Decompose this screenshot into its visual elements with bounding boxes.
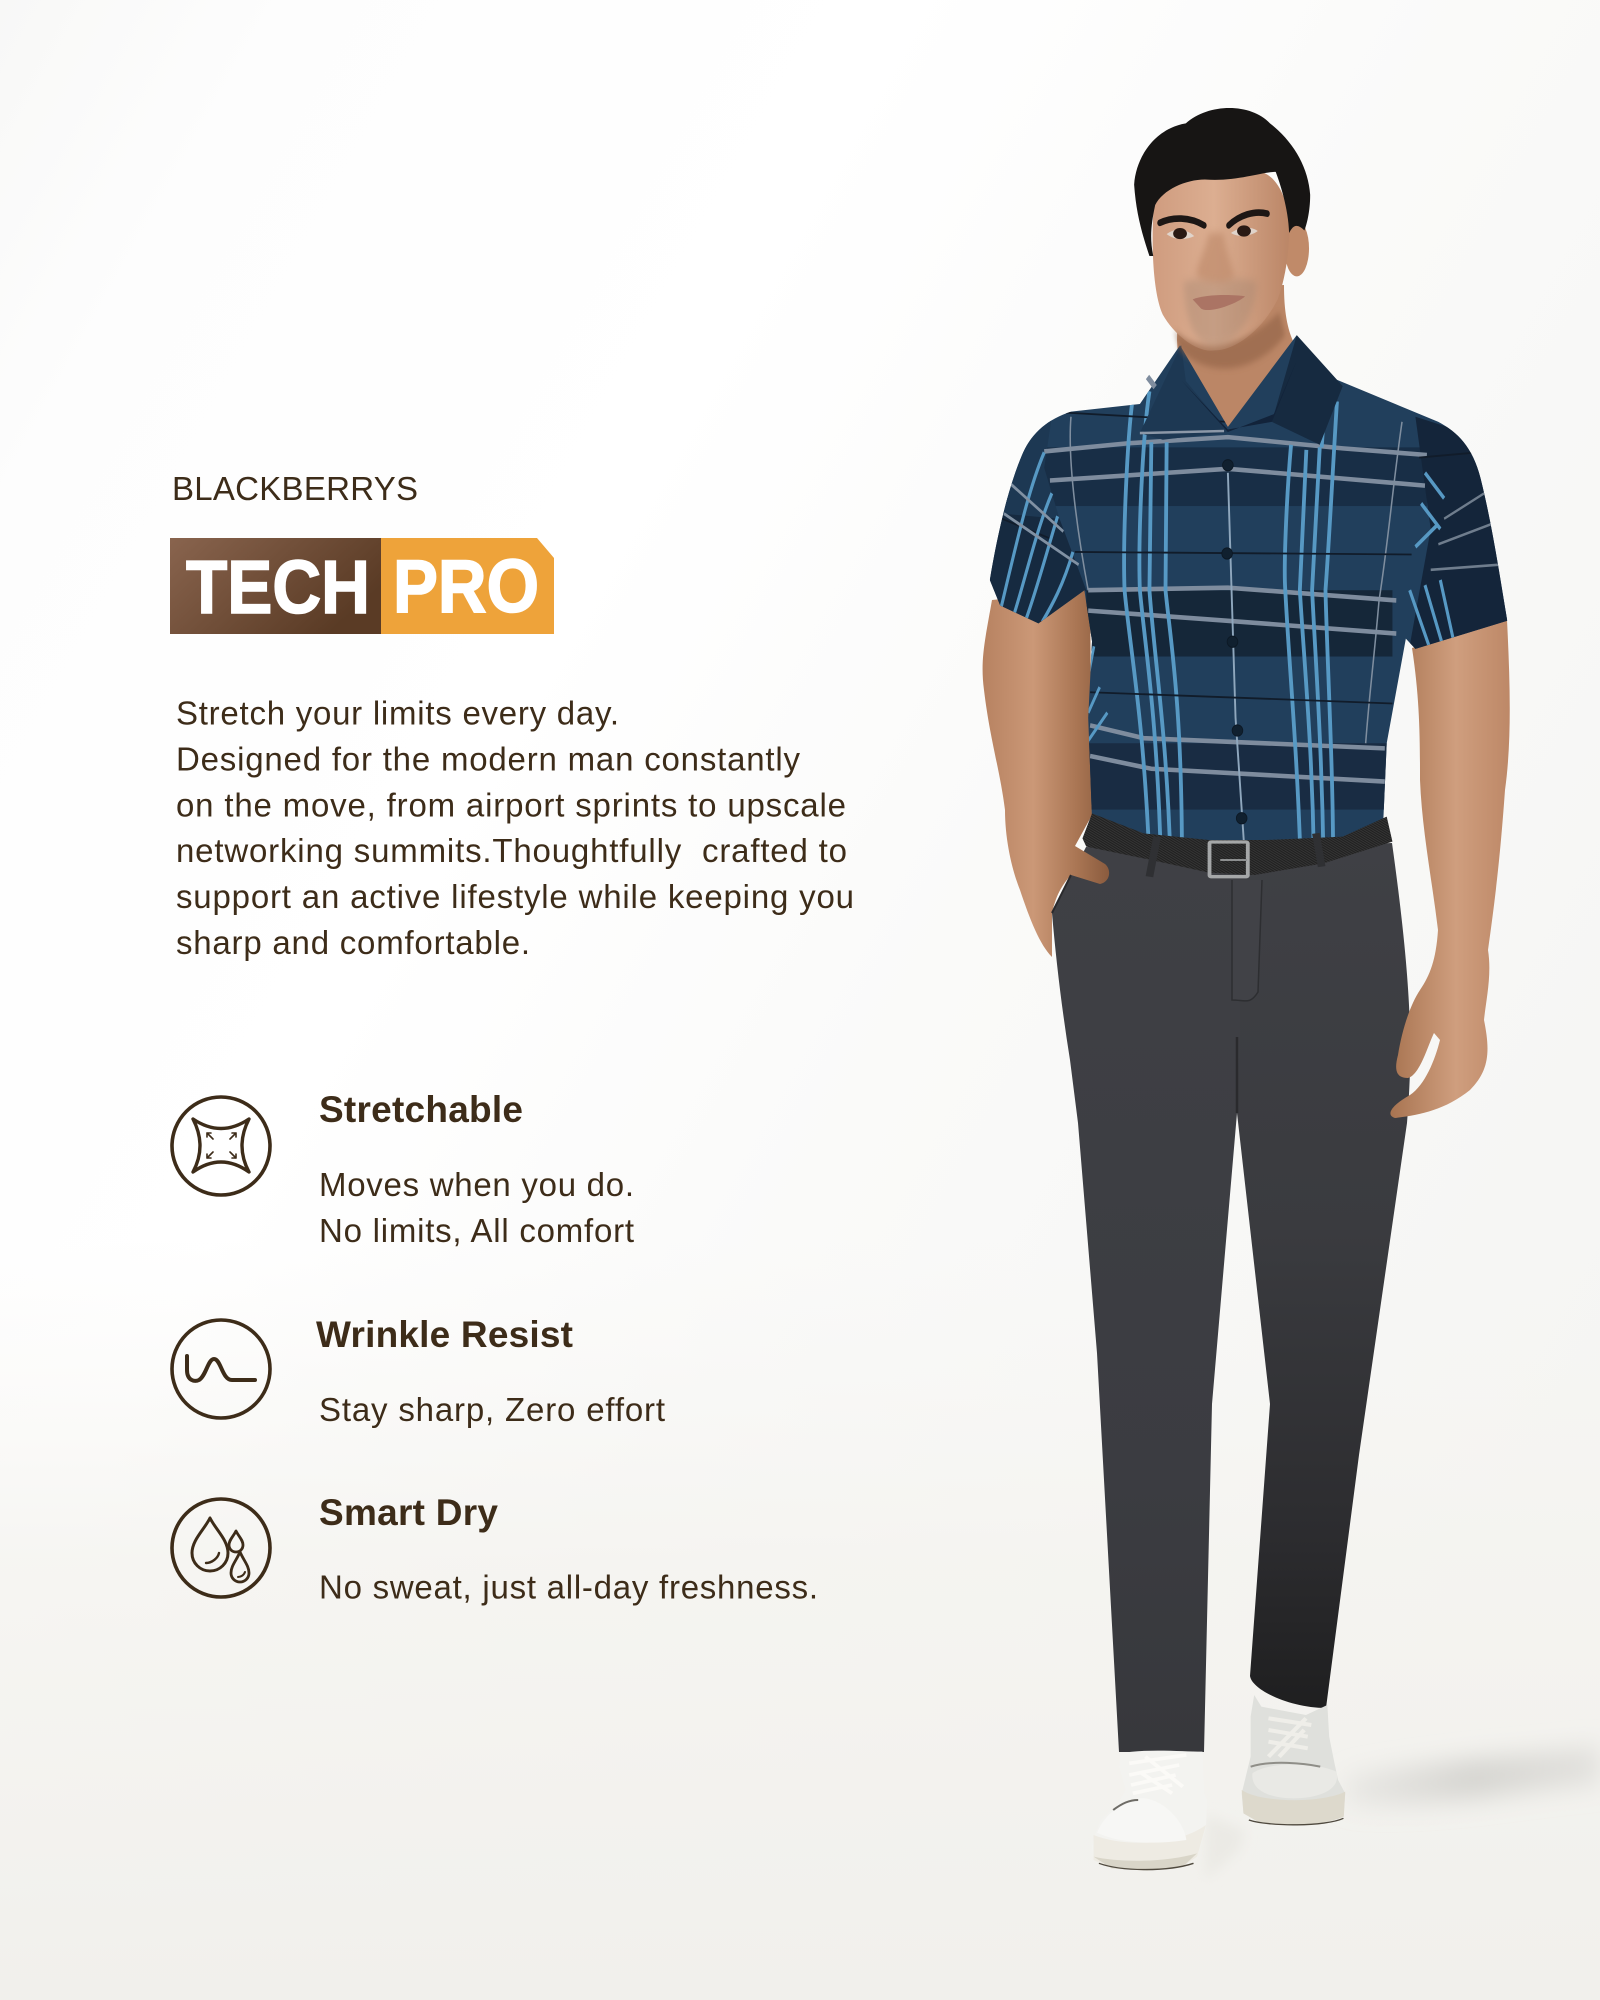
shirt	[983, 325, 1519, 866]
description: No limits, All comfort	[319, 1212, 634, 1249]
face	[1153, 171, 1289, 351]
intro paragraph: Stretch your limits every day.	[176, 694, 619, 732]
feature: Stretchable	[172, 1089, 634, 1249]
stubble	[1184, 278, 1257, 346]
model photo illustration	[983, 108, 1600, 1880]
collar	[1140, 335, 1343, 445]
intro paragraph: networking summits.Thoughtfully crafted to	[176, 832, 847, 869]
heading: Stretchable	[319, 1089, 523, 1130]
thin lines	[1002, 412, 1477, 861]
left shoe	[1092, 1751, 1207, 1871]
intro paragraph: Designed for the modern man constantly	[176, 740, 800, 778]
buttons	[1222, 460, 1247, 824]
intro paragraph: support an active lifestyle while keeping you	[176, 878, 854, 915]
hair	[1134, 108, 1310, 256]
neck shadow	[1174, 312, 1285, 369]
icon: water drops	[172, 1499, 270, 1597]
floor shadow	[1205, 1745, 1600, 1880]
intro paragraph: on the move, from airport sprints to upscale	[176, 786, 846, 824]
sleeve stripes right	[1410, 473, 1454, 645]
trouser pocket line	[1052, 875, 1071, 913]
belt	[1082, 813, 1392, 877]
eyes	[1167, 225, 1258, 239]
head	[1134, 108, 1310, 369]
lower left panel stripes	[1088, 646, 1107, 741]
description	[319, 1166, 634, 1249]
intro paragraph: sharp and comfortable.	[176, 924, 530, 961]
logo: Tech Pro badge: TECH	[186, 545, 370, 629]
neck	[1177, 285, 1295, 440]
logo: Tech Pro badge	[170, 538, 554, 634]
arm: hanging hand side	[1390, 620, 1510, 1118]
icon: smooth wave	[172, 1320, 270, 1418]
logo: Tech Pro badge: PRO	[393, 544, 539, 628]
horizontal grey stripes	[1044, 437, 1427, 782]
heading: Wrinkle Resist	[316, 1314, 573, 1355]
brand name: BLACKBERRYS	[172, 470, 418, 507]
vertical blue stripes	[1124, 391, 1337, 861]
description: Moves when you do.	[319, 1166, 634, 1203]
eyebrows	[1160, 213, 1267, 225]
arm: pocket hand side	[983, 590, 1109, 957]
feature: Smart Dry	[172, 1492, 818, 1606]
heading: Smart Dry	[319, 1492, 498, 1533]
feature: Wrinkle Resist	[172, 1314, 665, 1428]
mouth	[1193, 295, 1245, 310]
sleeve stripes left	[1001, 452, 1073, 622]
nose shadow	[1196, 233, 1235, 282]
right shoe	[1242, 1695, 1345, 1825]
ear	[1285, 220, 1309, 276]
trousers	[1052, 843, 1410, 1752]
description: Stay sharp, Zero effort	[319, 1391, 665, 1428]
description: No sweat, just all-day freshness.	[319, 1568, 818, 1606]
shoes	[1092, 1695, 1345, 1871]
intro paragraph	[176, 694, 854, 961]
icon: stretch fabric	[172, 1097, 270, 1195]
